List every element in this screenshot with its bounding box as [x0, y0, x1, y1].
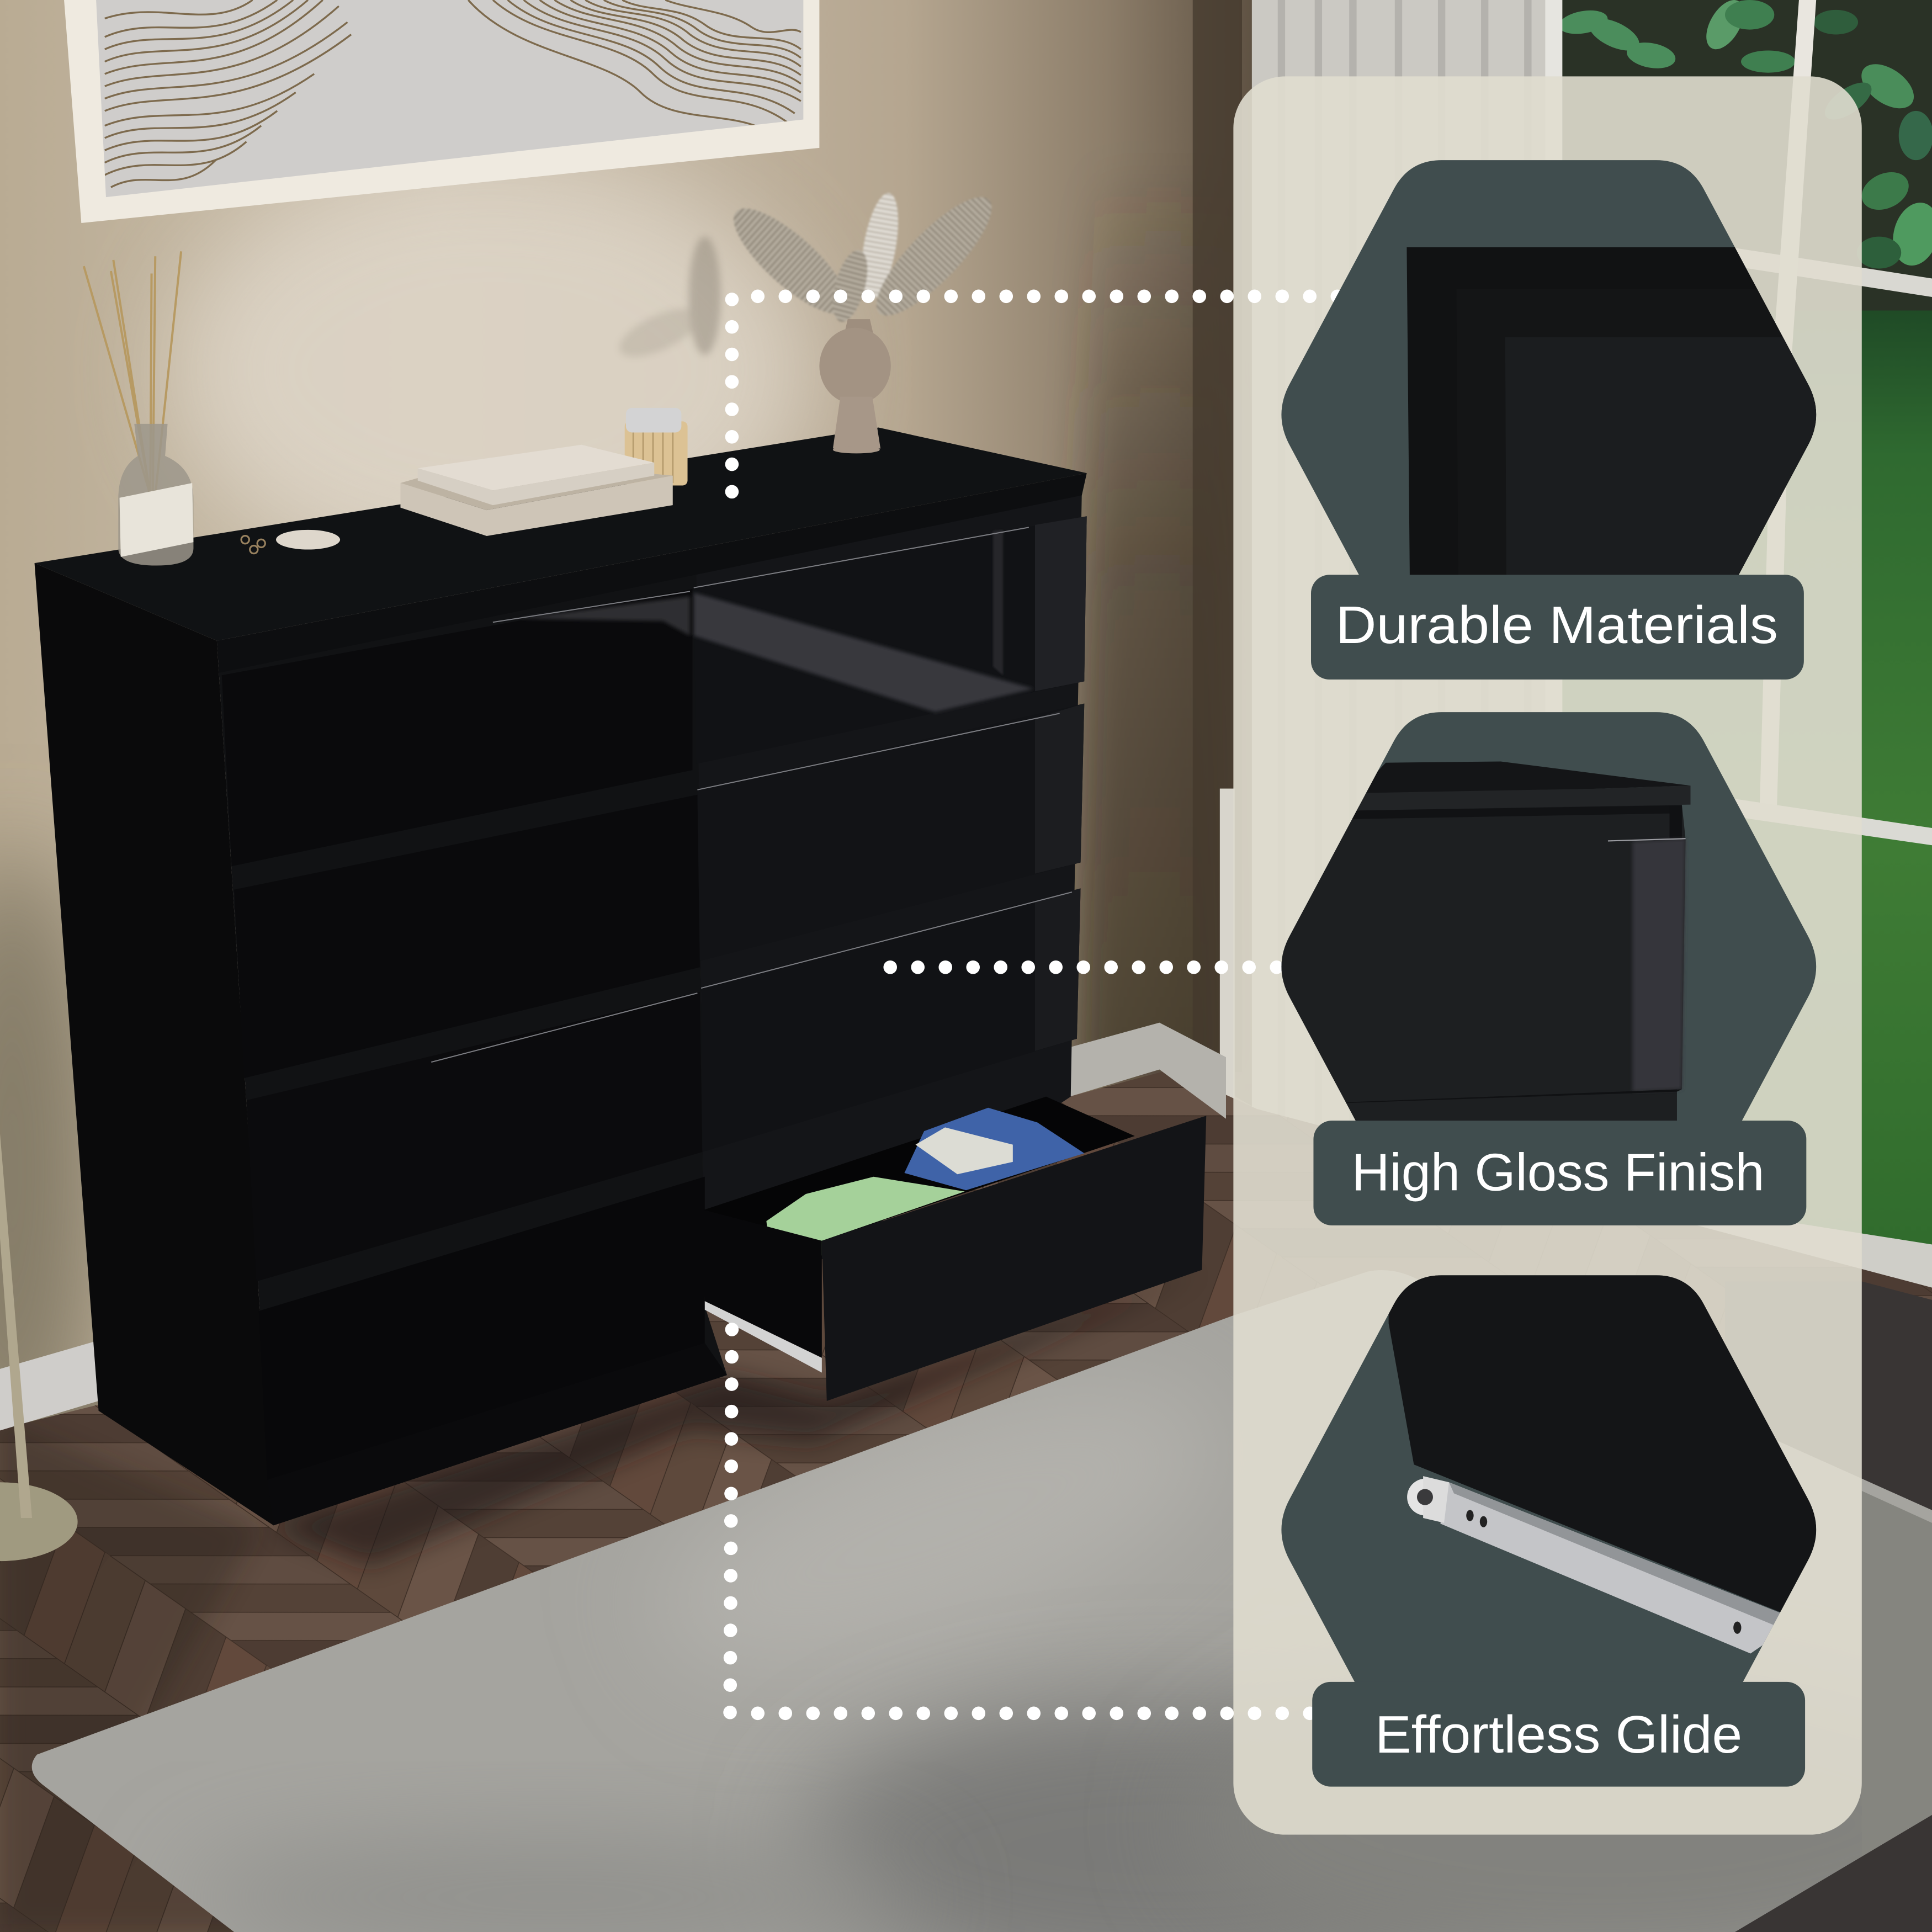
- dotted connector: effortless glide: [730, 1329, 1325, 1714]
- dresser close-up: [1269, 761, 1690, 1146]
- drawer front panel: [822, 1116, 1206, 1401]
- wall art: [64, 0, 819, 223]
- blue garment: [904, 1108, 1084, 1190]
- reed diffuser: [84, 251, 193, 566]
- rings: [241, 536, 265, 554]
- rug: [0, 1257, 1932, 1932]
- gloss reflections: [518, 516, 1087, 1051]
- window and garden: [1540, 0, 1932, 1294]
- drawer interior: [704, 1097, 1135, 1241]
- label bar: [1311, 575, 1804, 680]
- feature: effortless glide: [1281, 1257, 1848, 1787]
- white garment: [915, 1127, 1013, 1174]
- green garment: [766, 1177, 965, 1256]
- side panel: [34, 563, 274, 1525]
- curtain: [1220, 0, 1545, 1134]
- label text: High Gloss Finish: [1352, 1143, 1764, 1202]
- drawer runner close-up: [1389, 1257, 1848, 1654]
- dotted connector: high gloss finish: [890, 964, 1294, 970]
- drawer fronts: [222, 516, 1087, 1480]
- translucent feature panel: [1233, 76, 1862, 1835]
- right dark floor: [1725, 1281, 1932, 1932]
- candle: [625, 408, 688, 485]
- wall: [0, 0, 1257, 1429]
- books: [400, 445, 673, 536]
- pampas wall shadow: [613, 237, 721, 367]
- hexagon badge: [1281, 1275, 1816, 1784]
- dresser: [34, 428, 1206, 1525]
- bottle label: [120, 483, 193, 557]
- hexagon badge: [1281, 160, 1816, 669]
- dresser base: [267, 1343, 727, 1525]
- floor: [0, 1070, 1932, 1932]
- artwork canvas: [96, 0, 803, 197]
- drawer rail: [705, 1301, 822, 1373]
- material layers: [1406, 247, 1848, 690]
- vase: [819, 319, 891, 453]
- drawer side: [704, 1210, 822, 1358]
- hexagon badge: [1281, 712, 1816, 1221]
- label bar: [1312, 1682, 1805, 1787]
- label bar: [1313, 1121, 1806, 1225]
- pampas: [720, 183, 1006, 330]
- wall lighting: [0, 0, 1242, 1491]
- drawer highlights: [431, 527, 1072, 1062]
- contour lines: [105, 0, 801, 187]
- feature: durable materials: [1281, 160, 1848, 690]
- right baseboard: [1070, 1023, 1226, 1119]
- front carcass left: [217, 554, 727, 1525]
- top front edge: [217, 473, 1087, 673]
- decor on dresser: [84, 183, 1006, 566]
- dotted connector: durable materials: [732, 296, 1349, 495]
- open drawer: [704, 1097, 1206, 1401]
- left baseboard: [0, 1342, 99, 1431]
- frame: [64, 0, 819, 223]
- label text: Durable Materials: [1336, 596, 1778, 655]
- feature: high gloss finish: [1269, 712, 1816, 1225]
- ring dish: [276, 530, 340, 550]
- bottle: [118, 424, 193, 566]
- dresser floor shadow: [274, 1272, 1201, 1565]
- label text: Effortless Glide: [1375, 1705, 1742, 1764]
- reeds: [84, 251, 181, 495]
- front carcass right: [690, 493, 1082, 1306]
- floor lamp: [0, 1134, 78, 1561]
- top surface: [34, 428, 1087, 641]
- left floor shade: [0, 1417, 271, 1932]
